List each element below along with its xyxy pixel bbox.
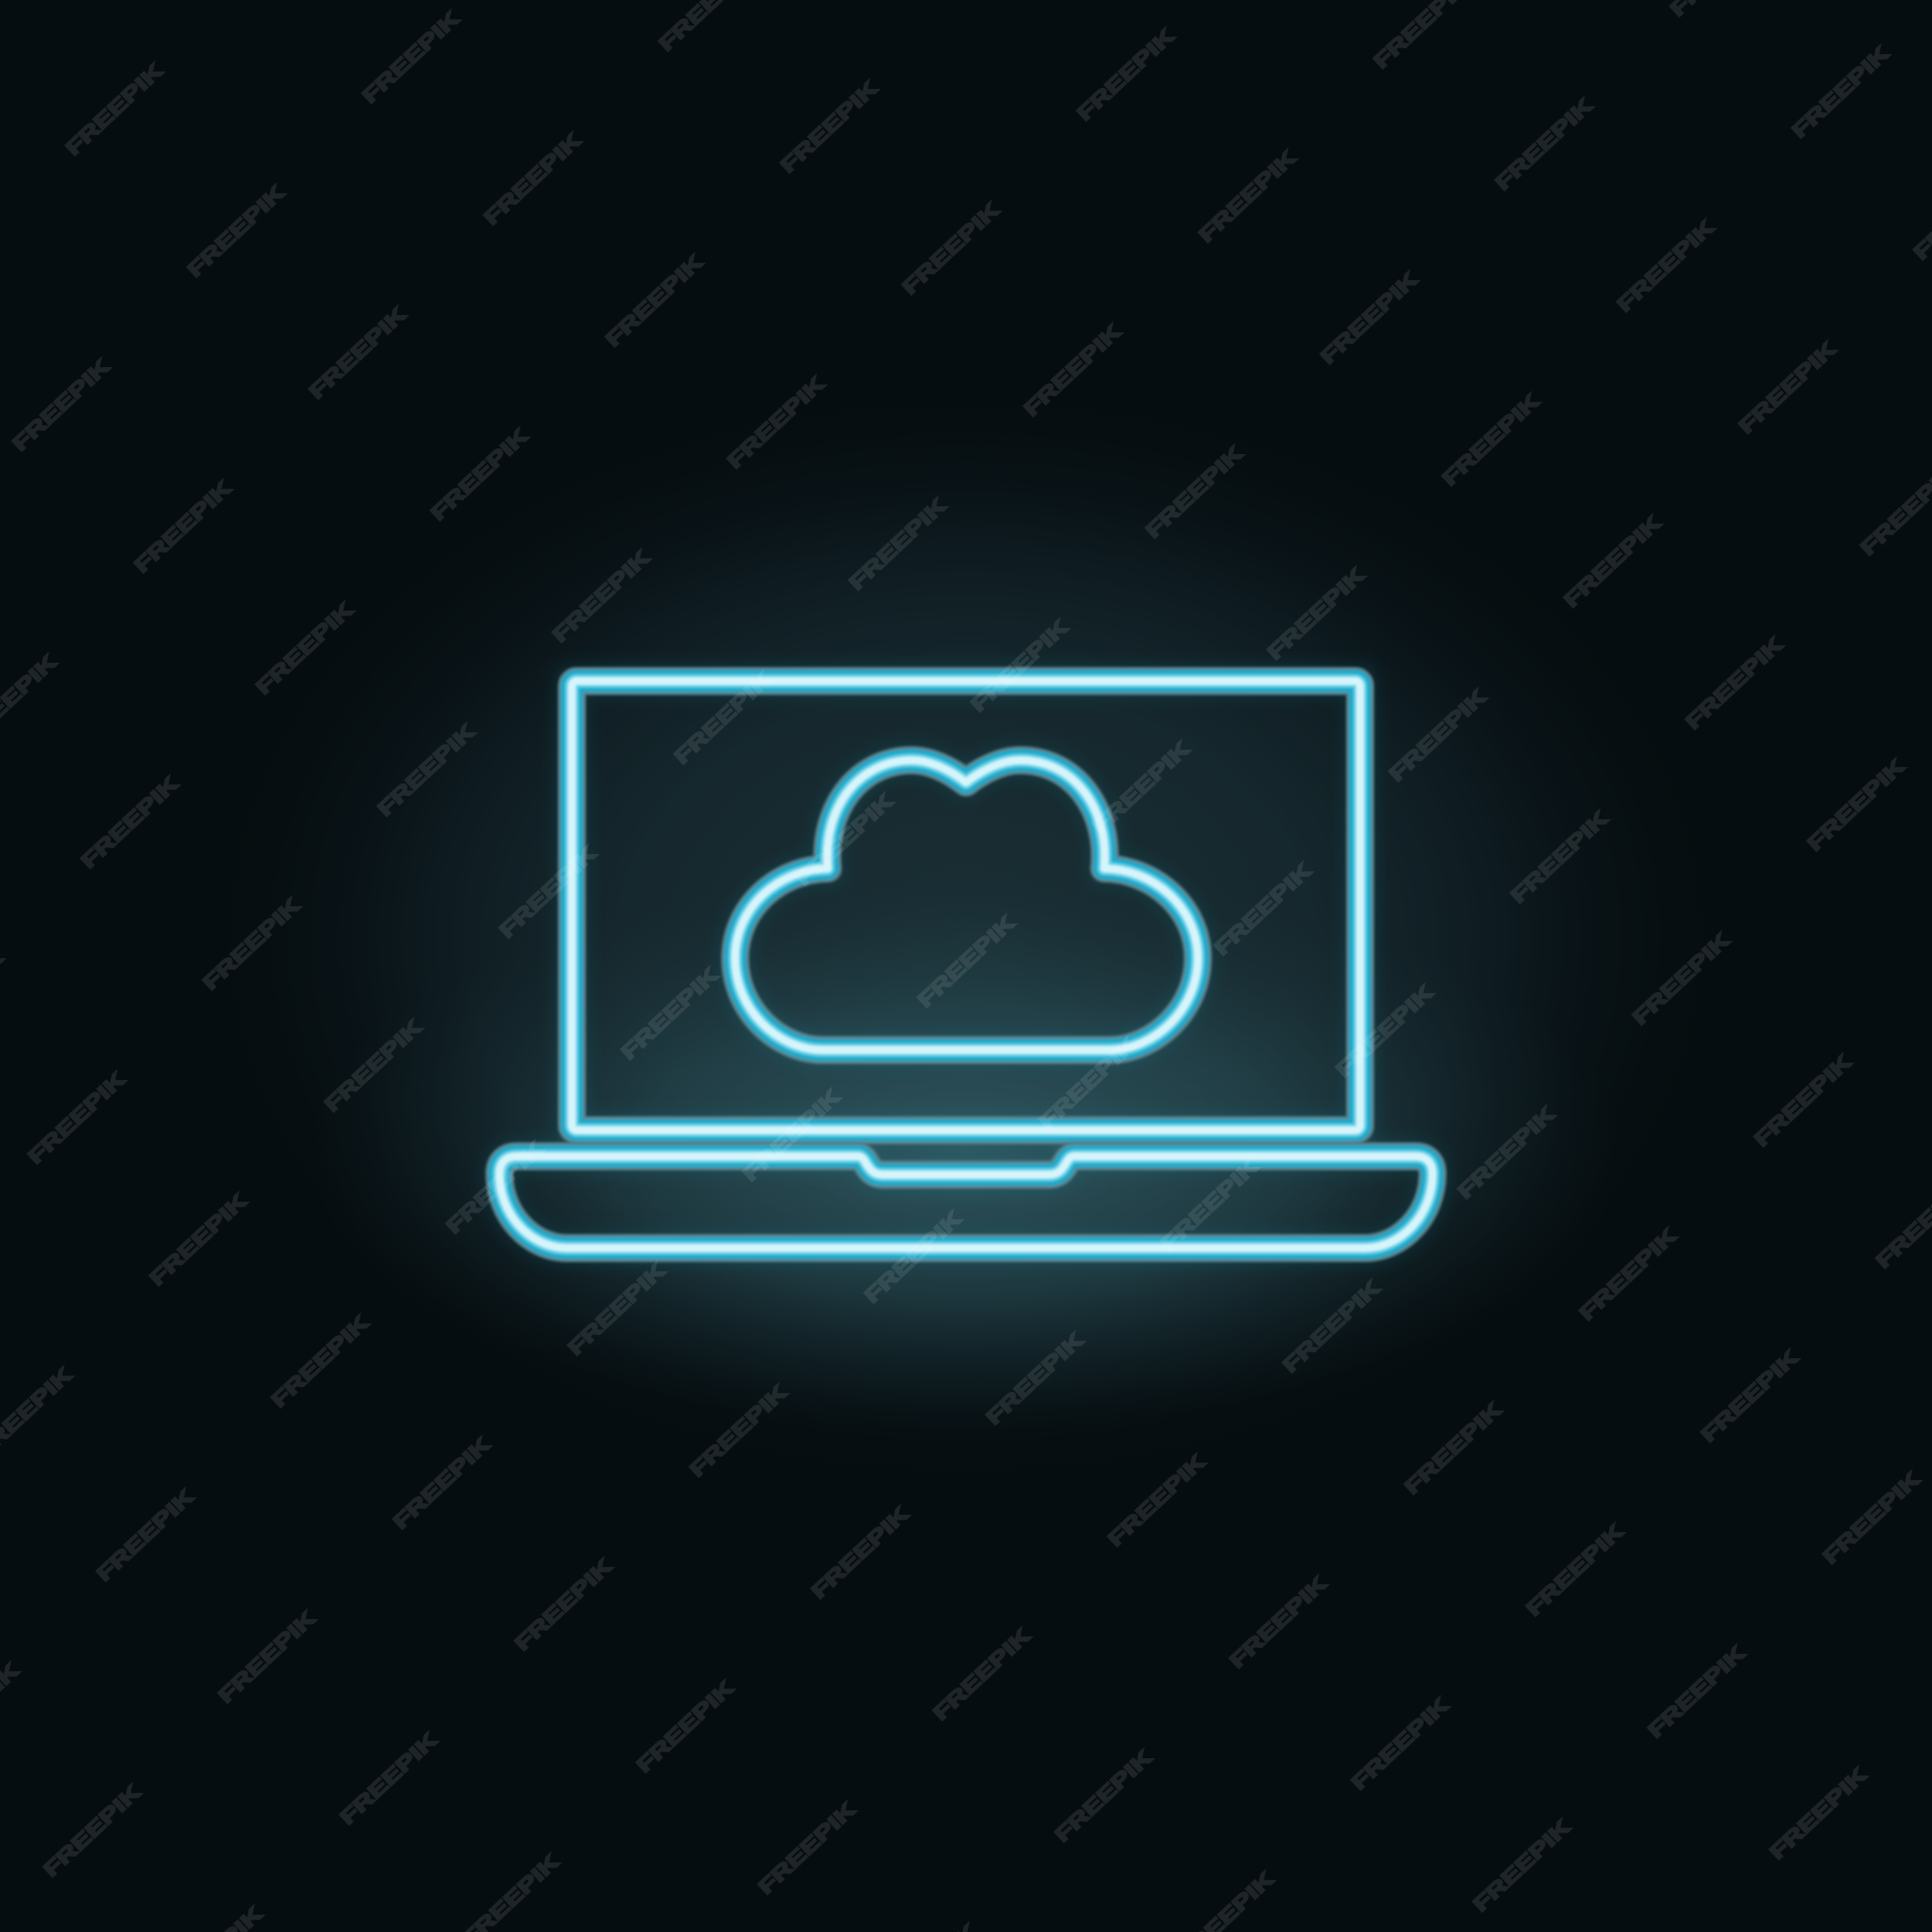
watermark grid: FREEPIK <box>914 912 1019 1012</box>
watermark grid: FREEPIK <box>252 599 357 699</box>
watermark grid: FREEPIK <box>1073 25 1179 126</box>
watermark grid: FREEPIK <box>602 251 707 352</box>
watermark grid: FREEPIK <box>617 964 723 1065</box>
watermark grid: FREEPIK <box>1438 390 1544 491</box>
watermark grid: FREEPIK <box>130 477 236 578</box>
watermark grid: FREEPIK <box>967 616 1072 717</box>
watermark grid: FREEPIK <box>1089 738 1194 838</box>
watermark grid: FREEPIK <box>358 8 464 108</box>
watermark grid: FREEPIK <box>442 1138 548 1238</box>
watermark grid: FREEPIK <box>633 1677 738 1777</box>
watermark grid: FREEPIK <box>77 773 183 873</box>
watermark grid: FREEPIK <box>1264 564 1369 665</box>
watermark grid: FREEPIK <box>389 1434 495 1534</box>
watermark grid: FREEPIK <box>1629 929 1734 1030</box>
watermark grid: FREEPIK <box>754 1799 860 1899</box>
watermark grid: FREEPIK <box>1750 1051 1856 1151</box>
watermark grid: FREEPIK <box>1613 216 1719 317</box>
watermark grid: FREEPIK <box>1469 1816 1575 1917</box>
watermark grid: FREEPIK <box>1522 1520 1628 1621</box>
watermark grid: FREEPIK <box>496 842 601 943</box>
watermark grid: FREEPIK <box>24 1068 129 1169</box>
watermark grid: FREEPIK <box>336 1729 441 1830</box>
watermark grid: FREEPIK <box>982 1329 1088 1430</box>
watermark grid: FREEPIK <box>62 60 167 160</box>
watermark grid: FREEPIK <box>845 495 951 595</box>
watermark grid: FREEPIK <box>1142 442 1247 543</box>
watermark grid: FREEPIK <box>1226 1573 1331 1673</box>
watermark grid: FREEPIK <box>1697 1347 1803 1447</box>
watermark grid: FREEPIK <box>1385 686 1491 786</box>
watermark grid: FREEPIK <box>1804 755 1909 856</box>
watermark grid: FREEPIK <box>93 1486 198 1586</box>
watermark grid: FREEPIK <box>1401 1399 1506 1499</box>
outer light halo <box>499 681 1433 1248</box>
watermark grid: FREEPIK <box>480 129 585 230</box>
watermark grid: FREEPIK <box>808 1503 913 1604</box>
icon: neon laptop with cloud <box>499 681 1433 1248</box>
background glow <box>193 377 1739 1497</box>
watermark grid: FREEPIK <box>777 77 882 178</box>
watermark grid: FREEPIK <box>9 355 114 456</box>
watermark grid: FREEPIK <box>861 1208 966 1308</box>
watermark grid: FREEPIK <box>1788 43 1893 143</box>
watermark grid: FREEPIK <box>670 668 776 769</box>
watermark grid: FREEPIK <box>1348 1694 1453 1795</box>
watermark grid: FREEPIK <box>146 1190 251 1291</box>
watermark grid: FREEPIK <box>199 895 304 995</box>
watermark grid: FREEPIK <box>1735 338 1840 439</box>
watermark grid: FREEPIK <box>321 1016 426 1117</box>
watermark grid: FREEPIK <box>1332 981 1437 1082</box>
watermark grid: FREEPIK <box>686 1381 791 1482</box>
watermark grid: FREEPIK <box>1279 1277 1384 1378</box>
watermark grid: FREEPIK <box>511 1555 616 1656</box>
watermark grid: FREEPIK <box>305 303 411 404</box>
watermark grid: FREEPIK <box>1104 1451 1209 1551</box>
cloud outline <box>735 760 1198 1050</box>
watermark grid: FREEPIK <box>1507 808 1612 908</box>
watermark grid: FREEPIK <box>929 1625 1035 1725</box>
watermark grid: FREEPIK <box>1210 860 1316 960</box>
watermark grid: FREEPIK <box>214 1607 320 1708</box>
watermark grid: FREEPIK <box>739 1086 844 1186</box>
watermark grid: FREEPIK <box>549 547 654 647</box>
watermark grid: FREEPIK <box>1819 1468 1924 1569</box>
watermark grid: FREEPIK <box>724 373 829 473</box>
watermark grid: FREEPIK <box>1317 269 1422 369</box>
watermark grid: FREEPIK <box>1157 1155 1263 1256</box>
laptop screen outline <box>572 681 1360 1130</box>
watermark grid: FREEPIK <box>1051 1747 1156 1847</box>
watermark grid: FREEPIK <box>1036 1034 1141 1134</box>
watermark grid: FREEPIK <box>1492 95 1597 195</box>
watermark grid: FREEPIK <box>184 182 289 282</box>
watermark grid: FREEPIK <box>898 199 1004 299</box>
watermark grid: FREEPIK <box>1020 321 1125 421</box>
watermark grid: FREEPIK <box>1644 1642 1749 1743</box>
watermark grid: FREEPIK <box>374 721 479 821</box>
watermark grid: FREEPIK <box>1195 147 1300 247</box>
watermark grid: FREEPIK <box>1576 1225 1681 1325</box>
laptop base outline <box>499 1156 1433 1248</box>
watermark grid: FREEPIK <box>564 1260 669 1360</box>
watermark grid: FREEPIK <box>268 1312 373 1412</box>
watermark grid: FREEPIK <box>1454 1103 1559 1204</box>
watermark grid: FREEPIK <box>1682 634 1787 734</box>
watermark grid: FREEPIK <box>427 425 532 526</box>
watermark grid: FREEPIK <box>1766 1764 1871 1864</box>
watermark grid: FREEPIK <box>40 1781 145 1882</box>
watermark grid: FREEPIK <box>792 790 897 891</box>
watermark grid: FREEPIK <box>1560 512 1665 612</box>
